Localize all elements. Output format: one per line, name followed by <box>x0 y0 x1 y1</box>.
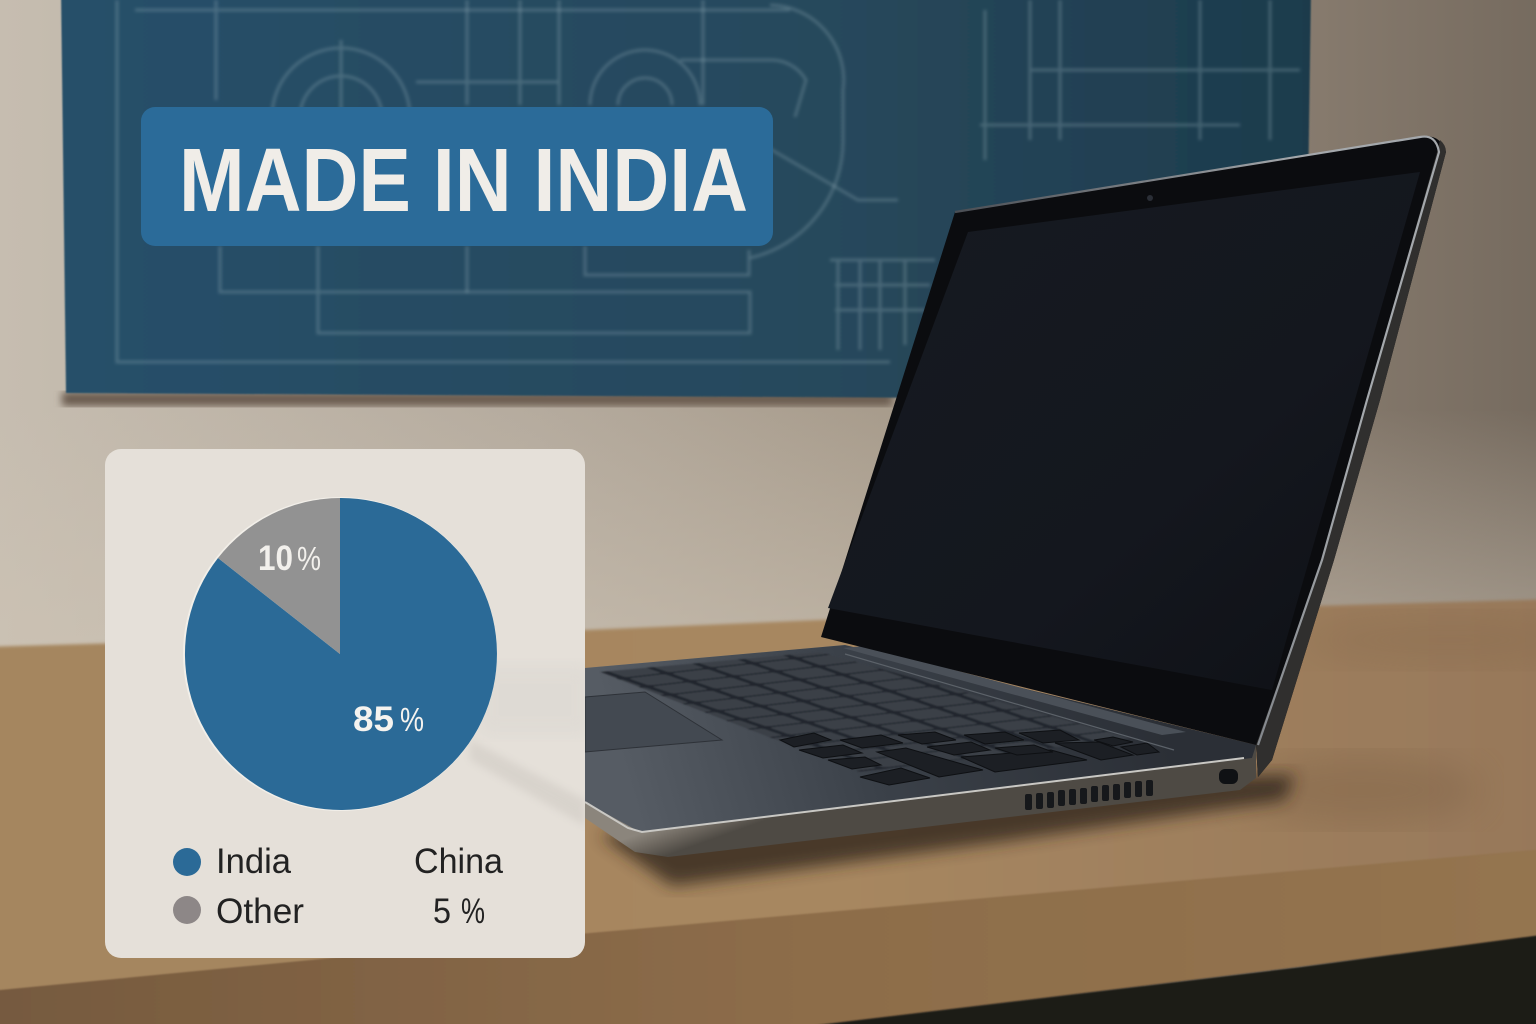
hinge bar <box>843 646 1186 735</box>
blueprint poster on the wall <box>61 0 1311 406</box>
label: 85%: % <box>400 701 424 738</box>
pie chart <box>183 497 497 811</box>
slice: India 85% <box>185 498 497 810</box>
background: wall <box>0 0 1536 660</box>
legend: Other: Other <box>216 892 304 931</box>
legend: 5%: % <box>461 892 485 931</box>
blueprint line drawings <box>117 0 1300 362</box>
legend: China: China <box>414 842 504 881</box>
wooden desk <box>0 599 1536 1024</box>
title banner <box>141 107 773 246</box>
laptop base <box>585 645 1256 857</box>
legend: Other <box>173 892 304 931</box>
slice: Other 10% <box>218 498 340 654</box>
label: 85%: 85 <box>353 700 394 739</box>
trackpad <box>585 692 722 752</box>
laptop shadow <box>600 775 1295 886</box>
label: 10%: 10 <box>258 539 293 578</box>
label: 10%: % <box>297 540 321 577</box>
laptop <box>585 136 1446 886</box>
legend: India <box>173 842 292 881</box>
vents <box>1025 780 1153 810</box>
legend: India: India <box>216 842 292 881</box>
laptop screen lid <box>821 136 1446 777</box>
title text: MADE IN INDIA <box>179 131 748 231</box>
panel: pie chart card <box>105 449 590 958</box>
legend: 5%: 5 <box>433 892 451 931</box>
port <box>1219 769 1238 784</box>
keyboard <box>600 652 1159 785</box>
